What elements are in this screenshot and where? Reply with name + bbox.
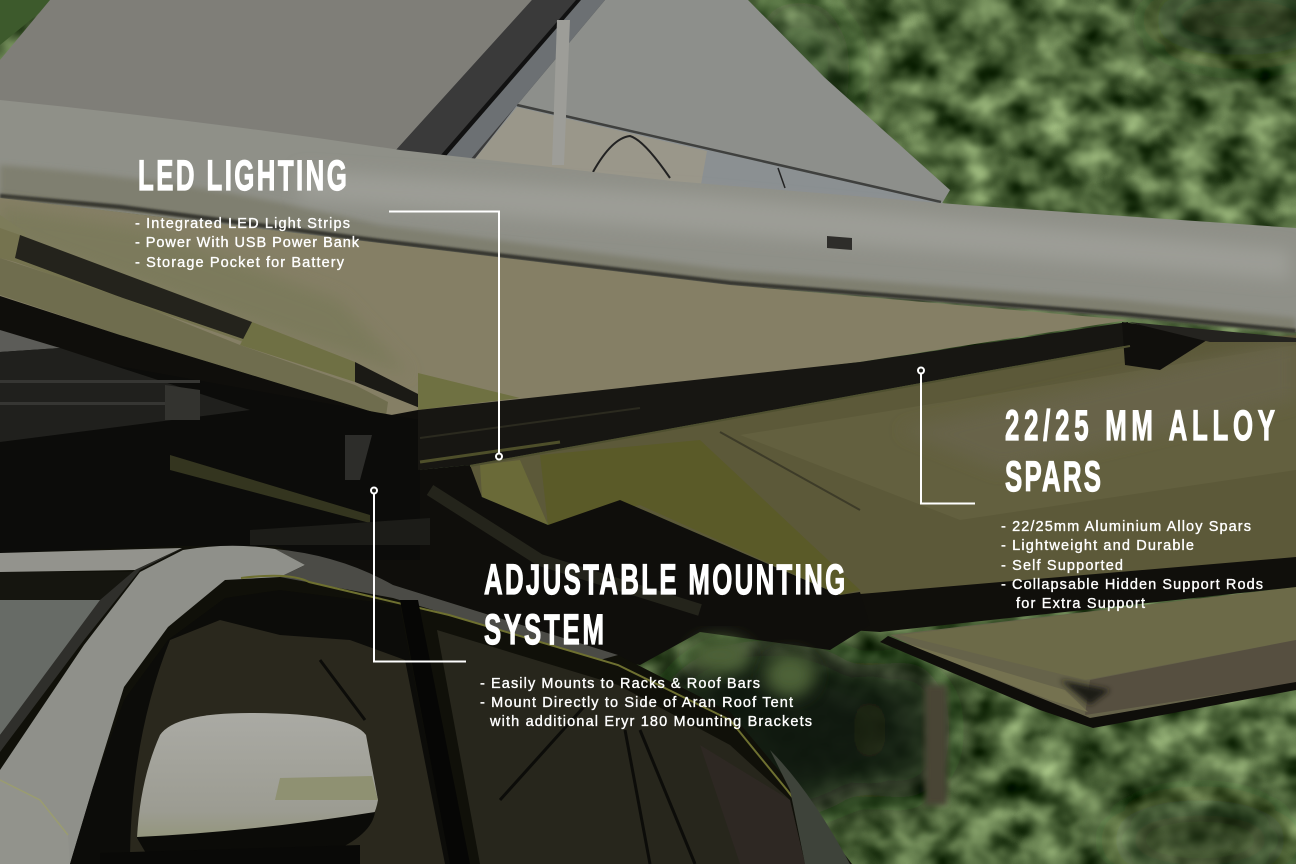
leader line: LED lighting bbox=[389, 212, 502, 460]
text block: spar features: - Self Supported bbox=[1001, 558, 1123, 574]
text block: spar features: - Collapsable Hidden Support Rods bbox=[1001, 577, 1263, 593]
callout: alloy spars bbox=[918, 368, 1275, 612]
text block: mounting features: - Easily Mounts to Racks & Roof Bars bbox=[480, 676, 760, 692]
text block: LED lighting features bbox=[135, 216, 360, 271]
text block: mounting features: with additional Eryr 180 Mounting Brackets bbox=[489, 714, 812, 730]
text block: spar features bbox=[1001, 519, 1263, 612]
callout: adjustable mounting system bbox=[371, 488, 845, 730]
text block: LED lighting features: - Storage Pocket for Battery bbox=[135, 255, 345, 271]
photo: vehicle bbox=[0, 546, 852, 864]
heading: alloy spars bbox=[1005, 401, 1275, 501]
heading: alloy spars: SPARS bbox=[1005, 452, 1101, 501]
photo: awning underside bbox=[0, 198, 1128, 420]
leader line: spars bbox=[918, 368, 975, 504]
photo: roof tent bbox=[0, 0, 965, 215]
text block: spar features: - Lightweight and Durable bbox=[1001, 538, 1194, 554]
text block: spar features: for Extra Support bbox=[1016, 596, 1145, 612]
photo: awning cover band bbox=[0, 100, 1296, 332]
heading: adjustable mounting system: SYSTEM bbox=[484, 605, 604, 654]
heading: LED lighting: LED LIGHTING bbox=[138, 151, 347, 200]
callout: LED lighting bbox=[135, 151, 502, 460]
text block: LED lighting features: - Integrated LED Light Strips bbox=[135, 216, 350, 232]
text block: mounting features bbox=[480, 676, 812, 730]
leader line: mounting bbox=[371, 488, 466, 662]
text block: spar features: - 22/25mm Aluminium Alloy Spars bbox=[1001, 519, 1251, 535]
heading: adjustable mounting system: ADJUSTABLE MOUNTING bbox=[484, 555, 845, 604]
photo: dark rack and mount area bbox=[0, 296, 1296, 697]
heading: alloy spars: 22/25 MM ALLOY bbox=[1005, 401, 1275, 450]
text block: LED lighting features: - Power With USB Power Bank bbox=[135, 235, 360, 251]
photo: lower canopy bbox=[470, 335, 1296, 728]
heading: adjustable mounting system bbox=[484, 555, 845, 654]
text block: mounting features: - Mount Directly to Side of Aran Roof Tent bbox=[480, 695, 793, 711]
